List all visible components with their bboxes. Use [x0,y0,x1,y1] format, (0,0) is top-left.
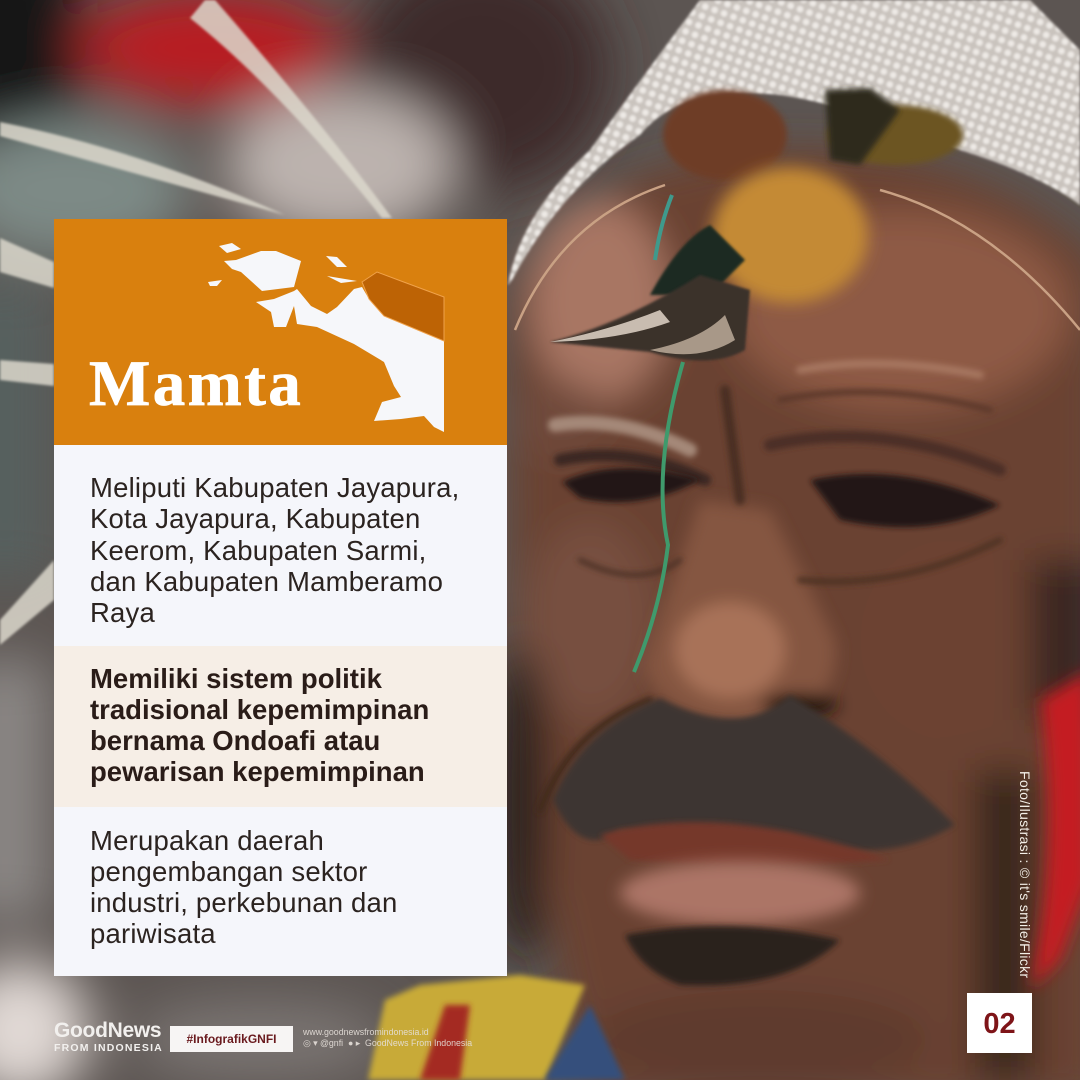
photo credit: Foto/Ilustrasi : © it's smile/Flickr [1017,771,1033,978]
text: regencies: dan Kabupaten Mamberamo [90,566,443,597]
text: regencies: Kota Jayapura, Kabupaten [90,503,420,534]
man [508,149,1080,1080]
text: sectors [90,825,398,949]
hashtag badge: #InfografikGNFI [186,1032,276,1046]
logo: GoodNews from Indonesia: GoodNews [54,1019,161,1042]
page number: 02 [983,1008,1016,1040]
page number [967,993,1032,1053]
website and social handles [303,1027,472,1048]
text: regencies: Keerom, Kabupaten Sarmi, [90,535,427,566]
panel: title header [54,219,507,445]
text: Ondoafi: bernama Ondoafi atau [90,725,380,756]
logo: GoodNews from Indonesia: FROM INDONESIA [54,1042,163,1054]
panel: political system [54,646,507,807]
text: Ondoafi: Memiliki sistem politik [90,663,382,694]
text: sectors: pengembangan sektor [90,856,367,887]
headband strings [515,185,1080,330]
fur ornament and claws [550,88,963,672]
moustache, lips, beard [553,695,955,985]
text: regencies [90,472,459,628]
eyes, brows and wrinkles [540,364,1000,810]
text: sectors: Merupakan daerah [90,825,324,856]
text: Ondoafi [90,663,429,787]
website and social handles: www.goodnewsfromindonesia.id [303,1027,429,1037]
text: sectors: industri, perkebunan dan [90,887,398,918]
panel: coverage area [54,445,507,646]
text: sectors: pariwisata [90,918,216,949]
text: Ondoafi: tradisional kepemimpinan [90,694,429,725]
feathers [0,0,392,645]
red feather and necklace [368,670,1080,1080]
map: Papua with Mamta highlighted [208,243,444,432]
website and social handles: ◎ ▾ @gnfi ● ▸ GoodNews From Indonesia [303,1038,472,1048]
hashtag badge [170,1026,293,1052]
nose [645,500,838,728]
logo: GoodNews from Indonesia [54,1019,163,1054]
text: Ondoafi: pewarisan kepemimpinan [90,756,425,787]
heading: Mamta: Mamta [89,348,303,420]
text: regencies: Meliputi Kabupaten Jayapura, [90,472,459,503]
beaded headband [508,0,1080,285]
text: regencies: Raya [90,597,155,628]
panel: development sectors [54,807,507,976]
